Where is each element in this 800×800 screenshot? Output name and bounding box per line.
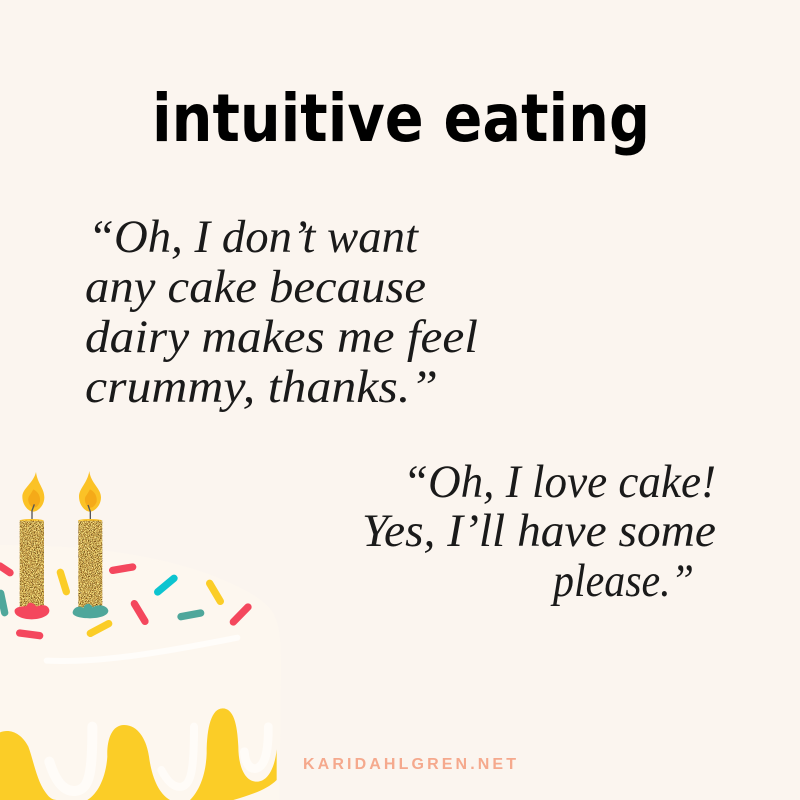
quote: love cake answer: please.” — [550, 555, 694, 607]
sprinkles — [0, 566, 248, 636]
quote: intuitive answer about dairy: crummy, thanks.” — [85, 361, 438, 413]
candle right — [73, 471, 108, 618]
quote: love cake answer — [362, 456, 716, 607]
website credit: KARIDAHLGREN.NET — [303, 756, 516, 773]
illustration: birthday cake — [0, 471, 281, 800]
cake body — [0, 545, 281, 800]
quote: intuitive answer about dairy: “Oh, I don’t want — [88, 211, 419, 263]
quote: intuitive answer about dairy: any cake because — [85, 261, 426, 313]
yellow icing drips — [0, 708, 277, 800]
quote: love cake answer: “Oh, I love cake! — [403, 456, 716, 508]
title: intuitive eating — [152, 80, 650, 157]
quote: intuitive answer about dairy — [85, 211, 478, 413]
white drizzle — [47, 638, 268, 791]
candle left — [15, 472, 49, 619]
white highlight stroke — [47, 638, 237, 661]
quote: intuitive answer about dairy: dairy makes me feel — [85, 311, 478, 363]
quote: love cake answer: Yes, I’ll have some — [362, 505, 716, 557]
